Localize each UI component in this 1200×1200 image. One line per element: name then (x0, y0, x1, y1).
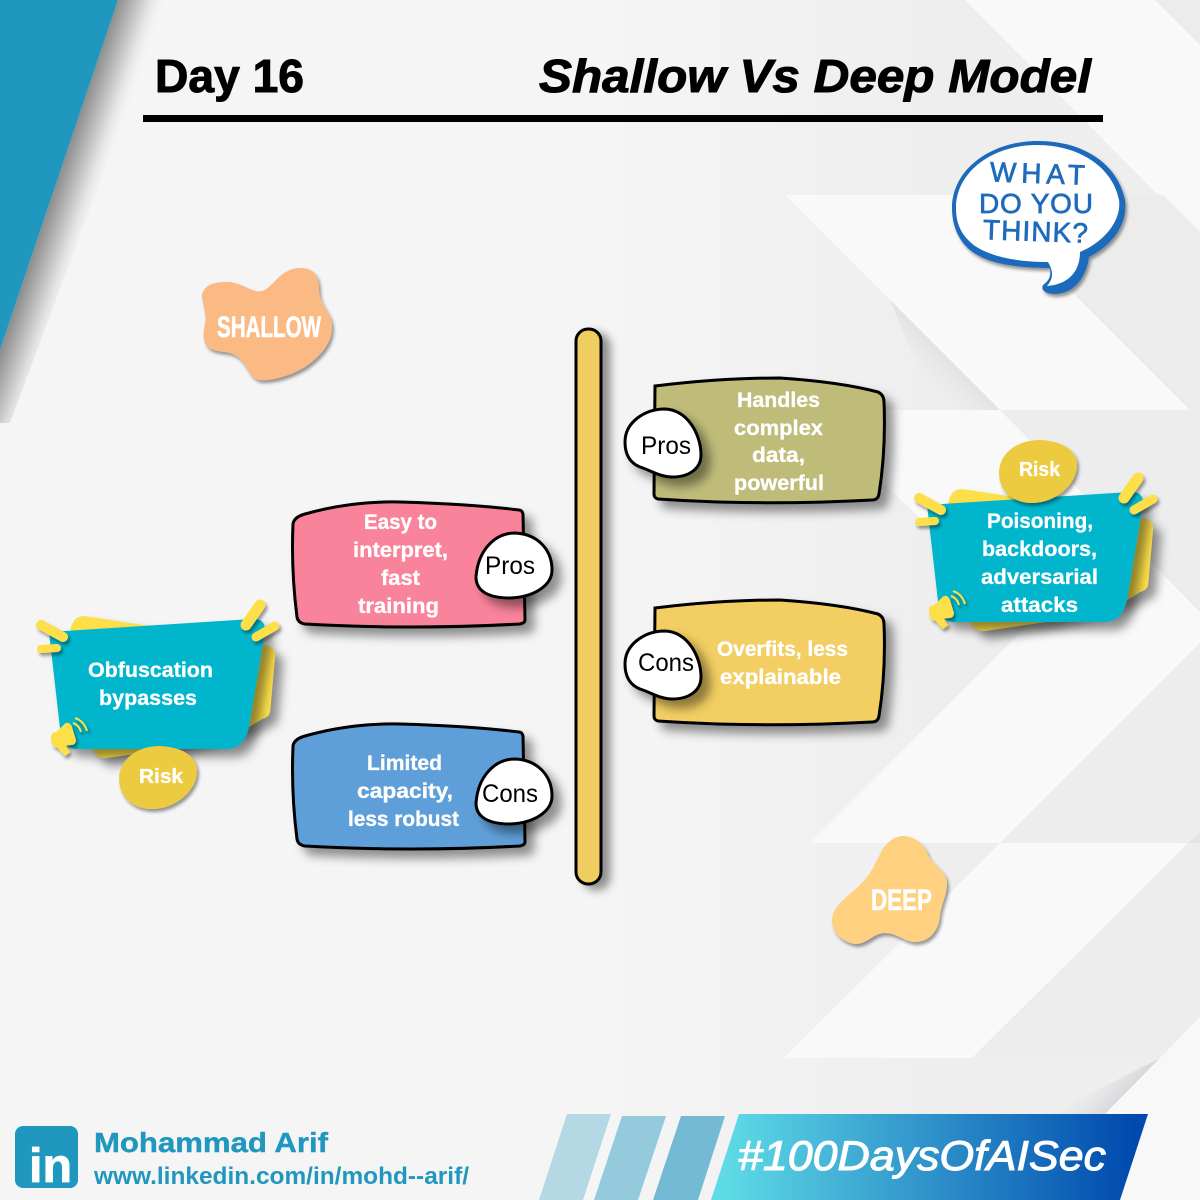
label blob: pros (625, 409, 701, 477)
panel: deep risk: attacks (1001, 594, 1078, 617)
panel: deep pros: data, (752, 444, 805, 467)
central divider pillar (576, 329, 601, 884)
title: day number: Day 16 (155, 50, 304, 102)
label blob: pros (476, 533, 552, 598)
title: topic: Shallow Vs Deep Model (539, 50, 1092, 102)
badge: deep (832, 836, 947, 944)
panel: deep cons: Overfits, less (717, 638, 848, 661)
label blob: risk: Risk (139, 766, 184, 788)
panel: deep risk (919, 440, 1153, 631)
speech bubble: what do you think: THINK? (982, 214, 1088, 249)
panel: deep cons (625, 600, 884, 725)
panel: shallow cons: Limited (367, 752, 442, 775)
panel: shallow pros: training (358, 595, 439, 618)
author url: www.linkedin.com/in/mohd--arif/ (93, 1163, 469, 1190)
panel: deep cons: explainable (720, 666, 841, 689)
panel: shallow cons: less robust (348, 808, 459, 831)
panel: deep risk: Poisoning, (987, 510, 1093, 533)
label blob: cons: Cons (482, 780, 538, 808)
speech bubble: what do you think: DO YOU (979, 188, 1093, 219)
panel: shallow cons: capacity, (357, 780, 453, 803)
panel: shallow risk (41, 605, 275, 809)
corner accent: blue triangle (0, 0, 118, 350)
panel: deep pros: powerful (734, 472, 824, 495)
panel: deep pros (625, 378, 884, 503)
label blob: cons (625, 631, 701, 699)
icon: linkedin logo (15, 1126, 78, 1193)
panel: deep risk: backdoors, (982, 538, 1097, 561)
icon: burst marks (919, 478, 1153, 522)
label blob: risk: Risk (1019, 459, 1061, 481)
speech bubble: what do you think: WHAT (989, 156, 1085, 191)
badge: shallow (202, 268, 332, 380)
panel: shallow pros: interpret, (353, 539, 448, 562)
speech bubble: what do you think (952, 141, 1125, 294)
badge: shallow: SHALLOW (217, 311, 321, 344)
author name: Mohammad Arif (94, 1127, 329, 1158)
hashtag banner: #100DaysOfAISec (738, 1132, 1106, 1179)
icon: megaphone (930, 591, 965, 628)
icon: linkedin logo: in (29, 1140, 72, 1193)
title underline (143, 115, 1103, 122)
label blob: risk (999, 440, 1077, 503)
panel: deep risk: adversarial (981, 566, 1098, 589)
panel: shallow pros: Easy to (364, 511, 437, 534)
panel: shallow pros (292, 502, 552, 627)
label blob: pros: Pros (641, 432, 691, 460)
label blob: cons (476, 759, 552, 824)
icon: megaphone (52, 718, 87, 755)
label blob: risk (119, 746, 197, 809)
panel: shallow pros: fast (381, 567, 420, 590)
panel: deep pros: complex (734, 417, 823, 440)
panel: deep pros: Handles (737, 389, 820, 412)
panel: shallow risk: bypasses (99, 687, 197, 710)
panel: shallow risk: Obfuscation (88, 659, 213, 682)
icon: burst marks (41, 605, 275, 649)
badge: deep: DEEP (871, 884, 932, 917)
hashtag banner (539, 1114, 1148, 1200)
panel: shallow cons (292, 724, 552, 849)
label blob: cons: Cons (638, 649, 694, 677)
label blob: pros: Pros (485, 552, 535, 580)
